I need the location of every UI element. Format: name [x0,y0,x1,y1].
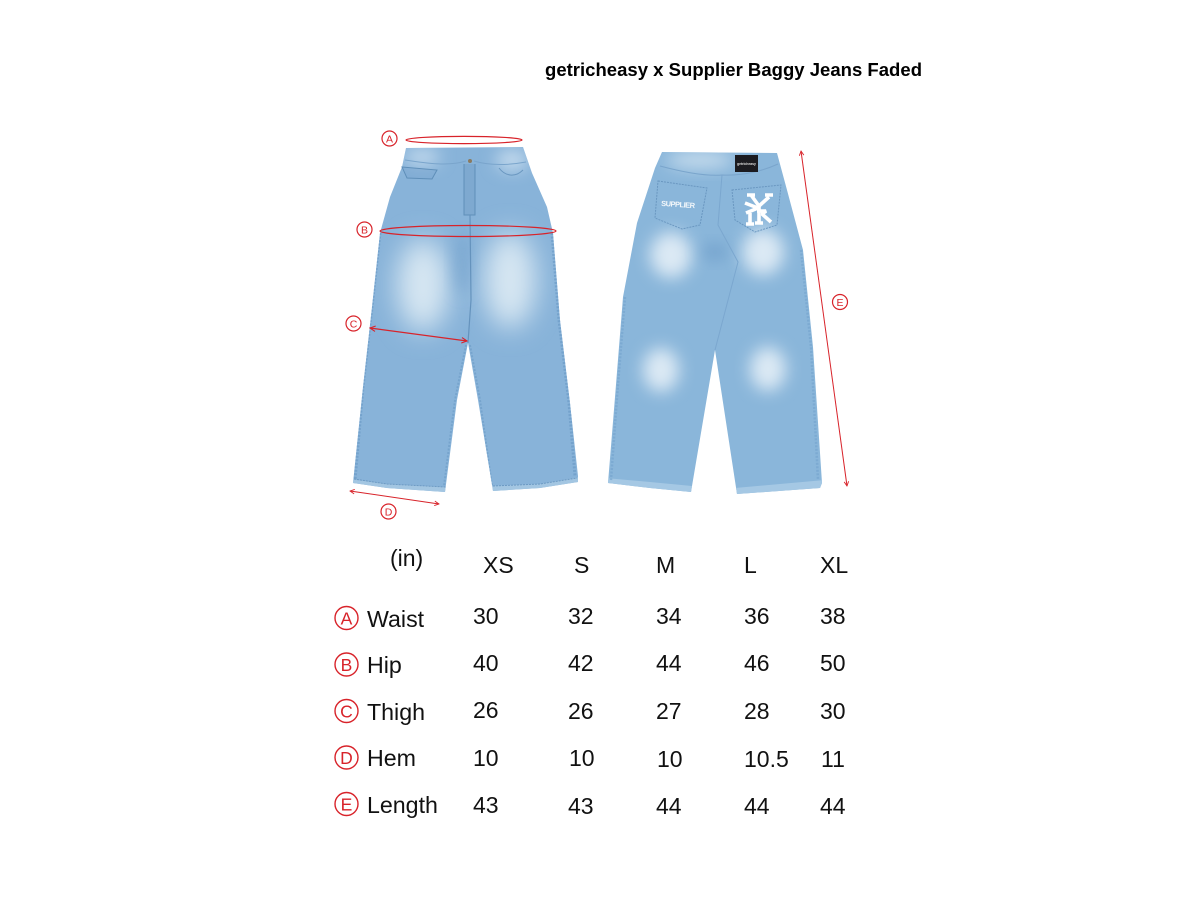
unit label: (in) [390,545,423,571]
measure E length [801,151,847,486]
hem bands [353,480,446,492]
measure B hip [380,226,556,236]
measure D hem [350,491,439,504]
waist label tag [735,155,758,172]
row: thigh: Thigh [367,699,425,725]
measure C thigh [370,328,467,341]
size headers [483,552,848,578]
size table [335,545,848,819]
row: length: 44 [656,793,682,819]
row: hip: 40 [473,650,499,676]
row: thigh: 27 [656,698,682,724]
row: waist: 32 [568,603,594,629]
badge B [357,222,372,237]
badge D [381,504,396,519]
badge B: B [361,224,368,236]
row: hip: Hip [367,652,402,678]
row: waist: 38 [820,603,846,629]
row: hip: B [341,655,352,675]
row: waist: 36 [744,603,770,629]
row: hem: Hem [367,745,416,771]
waist label tag: getricheasy [737,162,756,166]
row: length: 44 [820,793,846,819]
size headers: M [656,552,675,578]
badge A: A [386,133,393,145]
row: hip: 46 [744,650,770,676]
title: getricheasy x Supplier Baggy Jeans Faded [545,59,922,80]
row: length: 44 [744,793,770,819]
row: waist [335,603,846,632]
row: hem: 11 [821,746,845,772]
row: waist: Waist [367,606,425,632]
row: waist: 30 [473,603,499,629]
size headers: XS [483,552,514,578]
row: hip: 44 [656,650,682,676]
row: hem: D [340,748,353,768]
row: hem: 10.5 [744,746,789,772]
badge D: D [385,506,393,518]
row: thigh: 28 [744,698,770,724]
row: length: Length [367,792,438,818]
row: hem: 10 [657,746,683,772]
back view of jeans [608,152,822,494]
badge C [346,316,361,331]
row: length: 43 [473,792,499,818]
row: thigh: 26 [568,698,594,724]
row: waist: A [341,608,353,628]
row: hem [335,745,845,772]
row: hip: 42 [568,650,594,676]
size headers: S [574,552,589,578]
badge E: E [836,297,844,309]
front view of jeans [353,147,578,492]
row: length [335,792,846,819]
logo on right pocket [745,195,773,224]
logo on left pocket: SUPPLIER [661,199,696,210]
row: hem: 10 [473,745,499,771]
row: waist: 34 [656,603,682,629]
row: thigh: C [340,701,353,721]
size headers: L [744,552,757,578]
size headers: XL [820,552,848,578]
badge E [832,294,848,310]
row: thigh: 30 [820,698,846,724]
row: hip: 50 [820,650,846,676]
badge A [382,131,397,146]
measure A waist [406,136,522,144]
row: thigh [335,697,846,725]
row: length: E [341,794,352,814]
row: length: 43 [568,793,594,819]
badge C: C [350,318,358,330]
row: thigh: 26 [473,697,499,723]
row: hip [335,650,846,678]
row: hem: 10 [569,745,595,771]
